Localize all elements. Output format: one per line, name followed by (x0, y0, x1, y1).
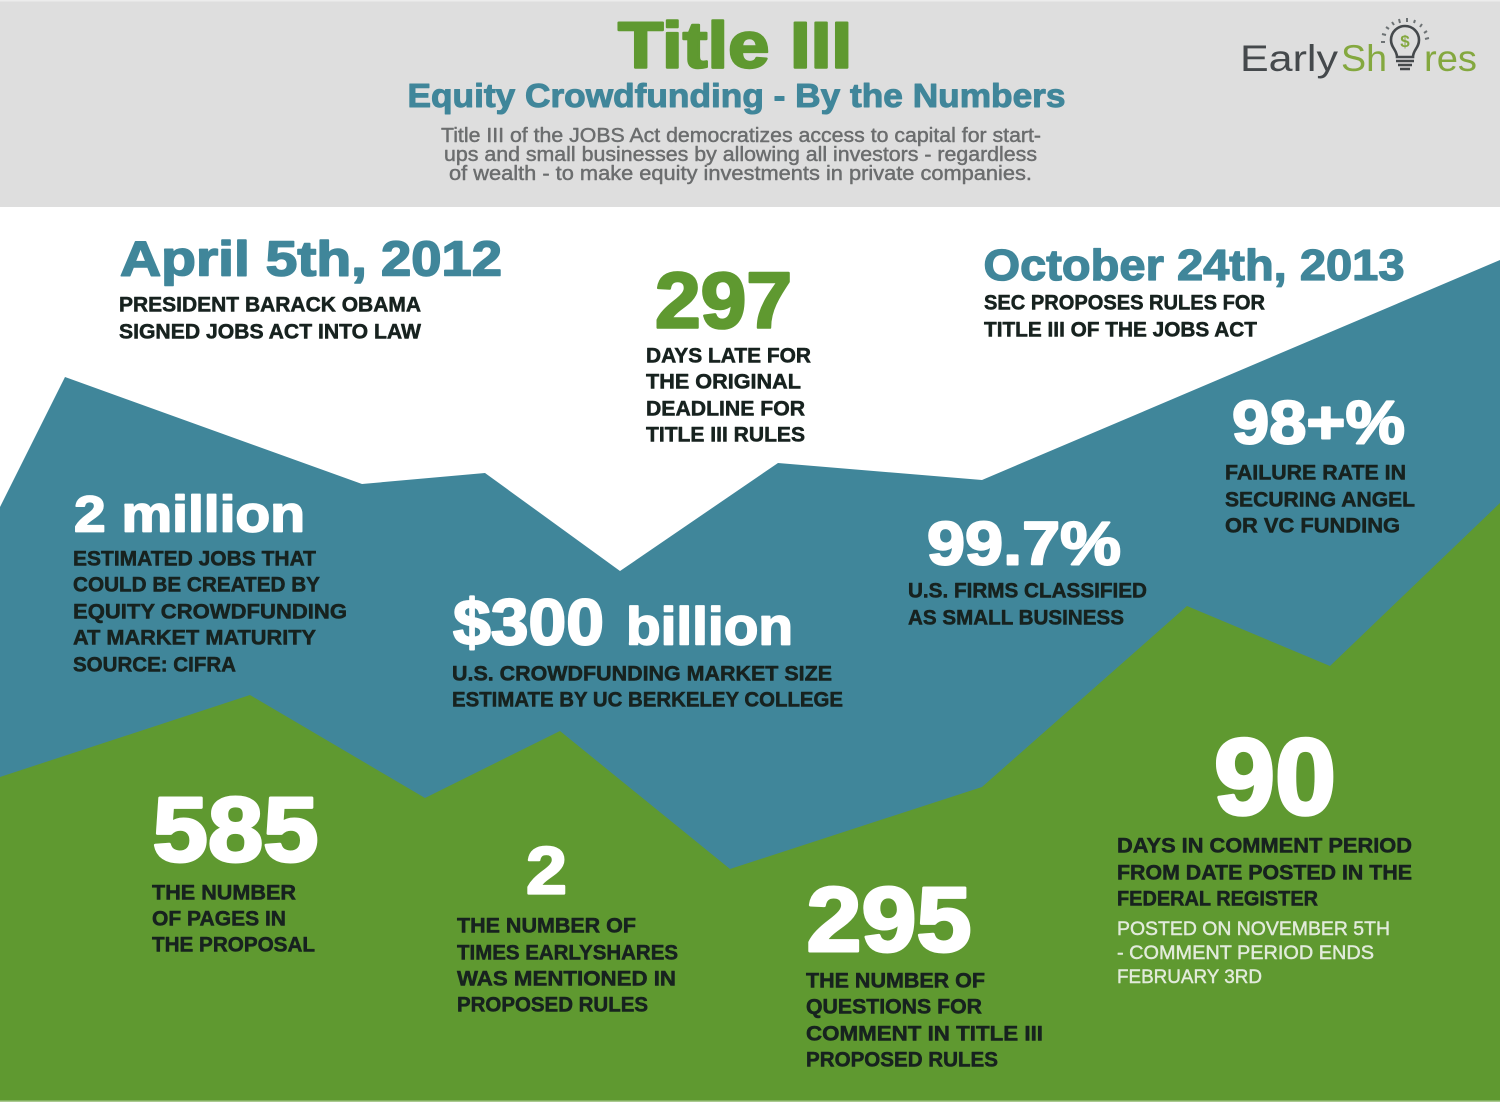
stat: 2 mentions: PROPOSED RULES (457, 994, 648, 1016)
stat: 295 questions: COMMENT IN TITLE III (806, 1022, 1043, 1046)
stat: October 24th, 2013: TITLE III OF THE JOBS ACT (984, 318, 1257, 342)
stat: 98+% failure rate: 98+% (1232, 388, 1405, 456)
stat: 2 million jobs: EQUITY CROWDFUNDING (73, 600, 347, 624)
stat: 90 days comment period: FEDERAL REGISTER (1117, 888, 1318, 910)
stat: $300 billion market: U.S. CROWDFUNDING MARKET SIZE (452, 662, 832, 686)
stat: 99.7% small business: AS SMALL BUSINESS (908, 606, 1124, 630)
stat: 2 million jobs: AT MARKET MATURITY (73, 626, 316, 650)
stat: April 5th, 2012: SIGNED JOBS ACT INTO LAW (119, 320, 421, 344)
stat: 2 million jobs: COULD BE CREATED BY (73, 574, 320, 596)
stat: 2 mentions: 2 (526, 834, 567, 908)
stat: 98+% failure rate: OR VC FUNDING (1225, 514, 1400, 538)
stat: 90 days comment period (1117, 716, 1412, 988)
stat: April 5th, 2012: PRESIDENT BARACK OBAMA (119, 294, 421, 316)
stat: $300 billion market (452, 586, 843, 712)
note: comment period dates: POSTED ON NOVEMBER 5TH (1117, 919, 1390, 940)
logo: EarlyShares (1240, 18, 1477, 79)
stat: 295 questions: QUESTIONS FOR (806, 996, 982, 1018)
stat: 2 mentions: WAS MENTIONED IN (457, 968, 676, 990)
stat: $300 billion market: $300 (453, 586, 604, 658)
stat: 297 days late (646, 256, 811, 446)
title: Title III (618, 8, 852, 82)
stat: 2 mentions (457, 834, 678, 1016)
logo: EarlyShares: Sh (1341, 38, 1387, 79)
stat: 297 days late: TITLE III RULES (646, 424, 805, 446)
stat: 295 questions (806, 869, 1043, 1072)
logo: EarlyShares: Early (1240, 38, 1339, 79)
stat: 2 mentions: THE NUMBER OF (457, 914, 636, 938)
stat: October 24th, 2013: SEC PROPOSES RULES FOR (984, 292, 1265, 314)
stat: 99.7% small business: 99.7% (927, 510, 1121, 578)
stat: April 5th, 2012 (119, 232, 502, 344)
stat: 585 pages (152, 779, 318, 956)
stat: 90 days comment period: 90 (1214, 716, 1336, 837)
stat: 99.7% small business (908, 510, 1147, 630)
icon: light bulb: $ (1400, 32, 1410, 51)
stat: 585 pages: THE NUMBER (152, 882, 296, 904)
area: teal mountain (0, 260, 1500, 1102)
icon: light bulb (1381, 18, 1429, 69)
stat: 295 questions: THE NUMBER OF (806, 970, 985, 992)
stat: 2 million jobs (73, 486, 347, 676)
stat: 98+% failure rate (1225, 388, 1415, 538)
stat: 297 days late: 297 (655, 256, 792, 344)
note: comment period dates: - COMMENT PERIOD ENDS (1117, 943, 1374, 964)
intro text block: ups and small businesses by allowing all investors - regardless (444, 144, 1037, 166)
stat: 297 days late: THE ORIGINAL (646, 370, 801, 394)
intro text block: Title III of the JOBS Act democratizes access to capital for start- (441, 125, 1041, 147)
stat: October 24th, 2013: October 24th, 2013 (984, 241, 1404, 290)
stat: $300 billion market: ESTIMATE BY UC BERKELEY COLLEGE (452, 688, 843, 712)
stat: 2 million jobs: SOURCE: CIFRA (73, 654, 236, 676)
stat: 99.7% small business: U.S. FIRMS CLASSIFIED (908, 580, 1147, 602)
stat: April 5th, 2012: April 5th, (120, 232, 367, 286)
stat: 297 days late: DEADLINE FOR (646, 398, 805, 420)
stat: 585 pages: OF PAGES IN (152, 908, 286, 930)
area: green mountain (0, 503, 1500, 1102)
stat: 2 million jobs: 2 million (74, 486, 305, 542)
panel: header band (0, 0, 1500, 207)
subtitle: Equity Crowdfunding - By the Numbers (408, 77, 1066, 114)
logo: EarlyShares: res (1424, 38, 1477, 79)
stat: 98+% failure rate: SECURING ANGEL (1225, 488, 1415, 512)
stat: 90 days comment period: DAYS IN COMMENT PERIOD (1117, 834, 1412, 858)
stat: 585 pages: 585 (152, 779, 318, 881)
stat: 295 questions: 295 (806, 869, 972, 971)
stat: 98+% failure rate: FAILURE RATE IN (1225, 462, 1406, 484)
stat: $300 billion market: billion (626, 598, 793, 656)
stat: April 5th, 2012: 2012 (381, 232, 502, 286)
stat: October 24th, 2013 (984, 241, 1404, 342)
intro text block: of wealth - to make equity investments in private companies. (449, 163, 1032, 185)
stat: 2 million jobs: ESTIMATED JOBS THAT (73, 548, 316, 570)
note: comment period dates: FEBRUARY 3RD (1117, 967, 1262, 988)
stat: 295 questions: PROPOSED RULES (806, 1048, 998, 1072)
note: comment period dates (1117, 919, 1390, 988)
intro text block (441, 125, 1041, 185)
stat: 297 days late: DAYS LATE FOR (646, 344, 811, 368)
stat: 585 pages: THE PROPOSAL (152, 934, 315, 956)
stat: 2 mentions: TIMES EARLYSHARES (457, 942, 678, 964)
stat: 90 days comment period: FROM DATE POSTED IN THE (1117, 862, 1412, 884)
